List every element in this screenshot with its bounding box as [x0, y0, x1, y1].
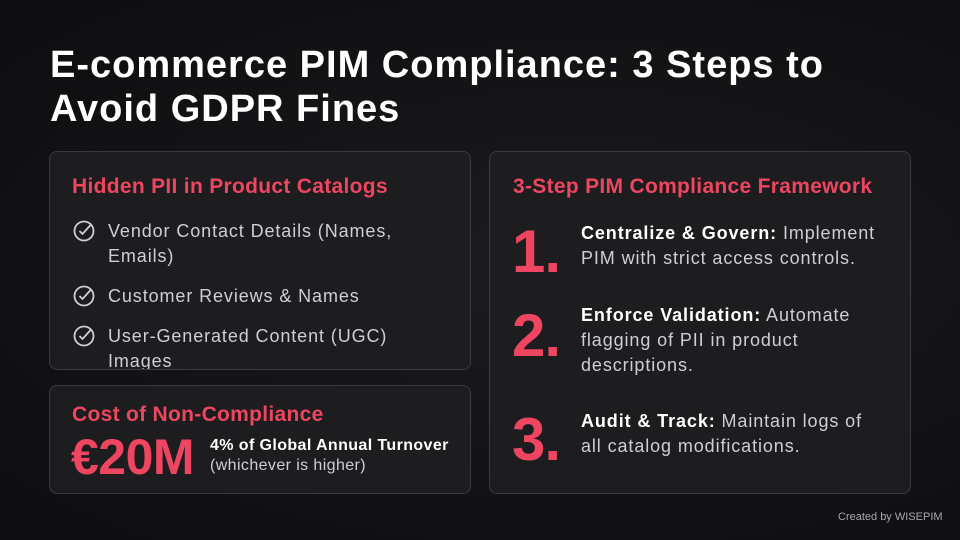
item 1 [108, 221, 392, 266]
step 2 text: flagging of PII in product [581, 330, 799, 350]
title: E-commerce PIM Compliance: 3 Steps to [50, 44, 824, 86]
item 3 [108, 326, 387, 370]
step 3 text [581, 411, 862, 456]
item 1: Vendor Contact Details (Names, [108, 221, 392, 241]
icon: check 2 [74, 286, 94, 306]
step 1 text: Centralize & Govern: Implement [581, 223, 875, 243]
panel: hidden PII [49, 151, 471, 370]
step 1 text: PIM with strict access controls. [581, 248, 856, 268]
heading: framework: 3-Step PIM Compliance Framework [513, 175, 872, 198]
item 1: Emails) [108, 246, 174, 266]
icon: check 3 [74, 326, 94, 346]
item 2: Customer Reviews & Names [108, 286, 360, 306]
fine text [210, 437, 449, 474]
number 2: 2. [512, 302, 560, 369]
step 3 [512, 406, 862, 473]
icon: check 1 [74, 220, 94, 242]
panel: framework [489, 151, 911, 494]
title [50, 44, 824, 130]
item 3: User-Generated Content (UGC) [108, 326, 387, 346]
big number: €20M [71, 429, 194, 485]
step 3 text: all catalog modifications. [581, 436, 801, 456]
panel: cost [49, 385, 471, 494]
step 1 text [581, 223, 875, 268]
heading: cost: Cost of Non-Compliance [72, 403, 324, 426]
fine text: (whichever is higher) [210, 457, 366, 474]
step 1 [512, 218, 875, 285]
step 2 text: Enforce Validation: Automate [581, 305, 850, 325]
heading: hidden PII: Hidden PII in Product Catalogs [72, 175, 388, 198]
footer credit: Created by WISEPIM [838, 511, 943, 523]
step 3 text: Audit & Track: Maintain logs of [581, 411, 862, 431]
step 2 [512, 302, 850, 375]
title: Avoid GDPR Fines [50, 88, 400, 130]
number 3: 3. [512, 406, 560, 473]
number 1: 1. [512, 218, 560, 285]
fine text: 4% of Global Annual Turnover [210, 437, 449, 454]
step 2 text [581, 305, 850, 375]
step 2 text: descriptions. [581, 355, 694, 375]
